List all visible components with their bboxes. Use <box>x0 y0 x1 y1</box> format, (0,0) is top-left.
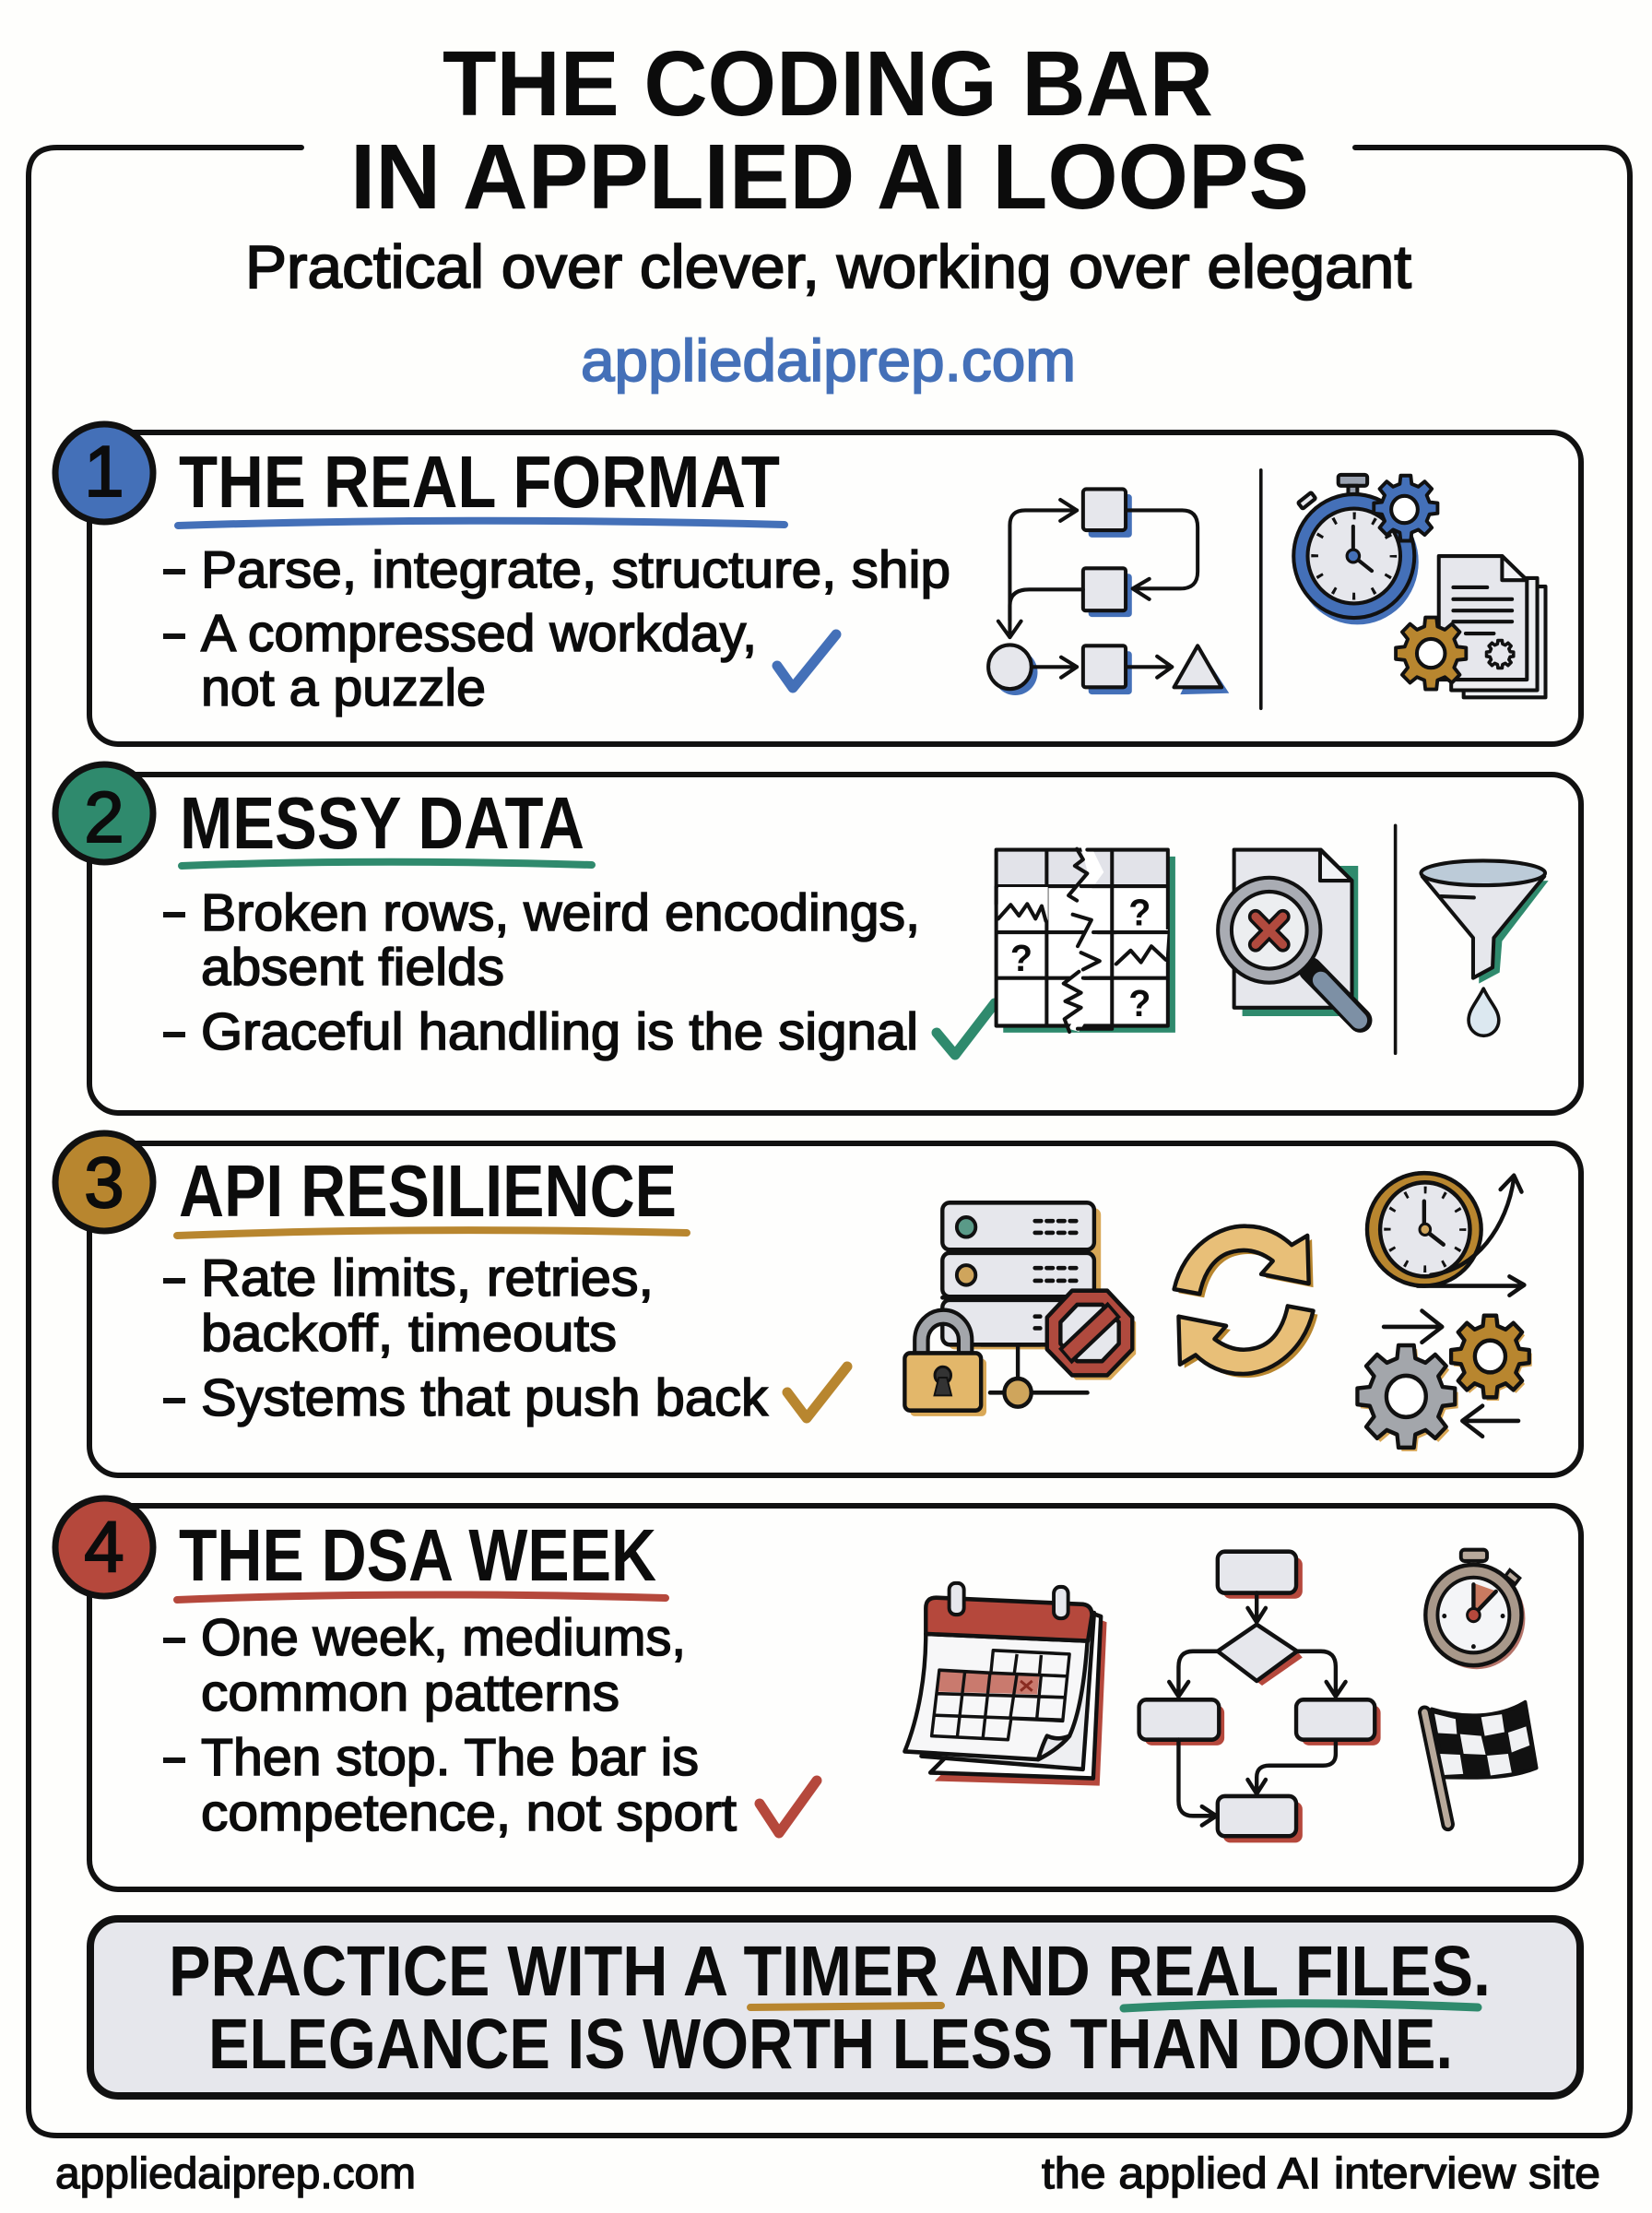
underline 2 <box>182 862 592 866</box>
banner underline: real files <box>1124 2004 1478 2008</box>
icons group 3 <box>904 1173 1532 1451</box>
icon: broken table: ? <box>1128 984 1150 1024</box>
check 4 <box>760 1781 817 1833</box>
check 2 <box>937 1003 995 1055</box>
icon: retry arrows <box>1174 1226 1317 1378</box>
bullets 2: Graceful handling is the signal <box>201 1002 918 1061</box>
icon: checkered flag <box>1424 1702 1537 1824</box>
panel 2: messy data <box>55 764 1581 1113</box>
bullets 4: Then stop. The bar is <box>201 1728 699 1787</box>
subtitle: Practical over clever, working over elegant <box>245 232 1411 301</box>
takeaway banner <box>90 1919 1580 2096</box>
banner line 2: ELEGANCE IS WORTH LESS THAN DONE. <box>208 2005 1453 2084</box>
heading 2: MESSY DATA <box>180 782 584 864</box>
icon: clock with backoff curve <box>1367 1173 1524 1296</box>
heading 1: THE REAL FORMAT <box>179 441 780 523</box>
icon: documents <box>1439 556 1546 697</box>
icon: blue gear <box>1374 476 1437 541</box>
bullets 3 <box>163 1249 769 1427</box>
icon: stop sign <box>1047 1291 1136 1380</box>
heading 4: THE DSA WEEK <box>179 1514 656 1596</box>
underline 3 <box>177 1230 687 1236</box>
panel 4: the dsa week <box>55 1498 1581 1889</box>
bullets 2 <box>163 883 920 1061</box>
bullets 4: One week, mediums, <box>201 1608 686 1667</box>
banner line 1: PRACTICE WITH A TIMER AND REAL FILES. <box>169 1932 1491 2011</box>
icon: flow diagram <box>988 489 1229 695</box>
bullets 2: Broken rows, weird encodings, <box>201 883 920 942</box>
icon: broken table: ? <box>1128 893 1150 933</box>
check 3 <box>787 1367 847 1418</box>
badge 2 <box>55 764 153 862</box>
icons group 1 <box>988 470 1546 708</box>
banner underline: timer <box>750 2006 941 2007</box>
heading 3: API RESILIENCE <box>179 1150 677 1232</box>
icon: document with magnifier <box>1218 850 1360 1021</box>
bullets 4 <box>163 1608 737 1842</box>
icon: broken table: ? <box>1010 938 1032 979</box>
icon: padlock <box>904 1317 986 1416</box>
bullets 4: competence, not sport <box>201 1783 737 1842</box>
bullets 3: Systems that push back <box>201 1368 769 1427</box>
bullets 3: backoff, timeouts <box>201 1304 617 1363</box>
panel 3: api resilience <box>55 1133 1581 1475</box>
bullets 1: not a puzzle <box>201 658 486 717</box>
title: IN APPLIED AI LOOPS <box>350 125 1309 229</box>
icon: calendar <box>904 1583 1107 1786</box>
badge 3: 3 <box>84 1142 124 1223</box>
title: THE CODING BAR <box>442 32 1213 136</box>
check 1 <box>777 634 836 688</box>
badge 1 <box>55 424 153 522</box>
icons group 4 <box>904 1550 1537 1842</box>
bullets 3: Rate limits, retries, <box>201 1249 654 1308</box>
bullets 4: common patterns <box>201 1663 620 1722</box>
icon: small stopwatch <box>1425 1550 1525 1669</box>
footer right: tagline: the applied AI interview site <box>1042 2148 1600 2197</box>
panel 1: the real format <box>55 424 1581 744</box>
icon: funnel and drop <box>1421 860 1549 1035</box>
icon: flowchart <box>1139 1552 1381 1842</box>
underline 4 <box>177 1594 666 1600</box>
bullets 2: absent fields <box>201 938 504 997</box>
divider <box>1392 825 1399 1053</box>
badge 4 <box>55 1498 153 1596</box>
icon: server rack <box>942 1202 1101 1407</box>
bullets 1 <box>163 540 950 717</box>
badge 3 <box>55 1133 153 1231</box>
badge 1: 1 <box>84 431 124 512</box>
divider <box>1257 470 1265 708</box>
badge 2: 2 <box>84 776 124 858</box>
title <box>350 32 1309 229</box>
bullets 1: Parse, integrate, structure, ship <box>201 540 950 599</box>
underline 1 <box>178 521 785 526</box>
website link: appliedaiprep.com <box>581 327 1076 394</box>
icon: meshing gears <box>1357 1311 1532 1451</box>
badge 4: 4 <box>84 1506 124 1587</box>
bullets 1: A compressed workday, <box>201 604 757 663</box>
footer left: site: appliedaiprep.com <box>55 2148 416 2197</box>
icons group 2 <box>997 825 1549 1053</box>
icon: stopwatch <box>1293 475 1419 624</box>
icon: broken table <box>997 846 1175 1033</box>
icon: gold gear <box>1396 618 1466 690</box>
